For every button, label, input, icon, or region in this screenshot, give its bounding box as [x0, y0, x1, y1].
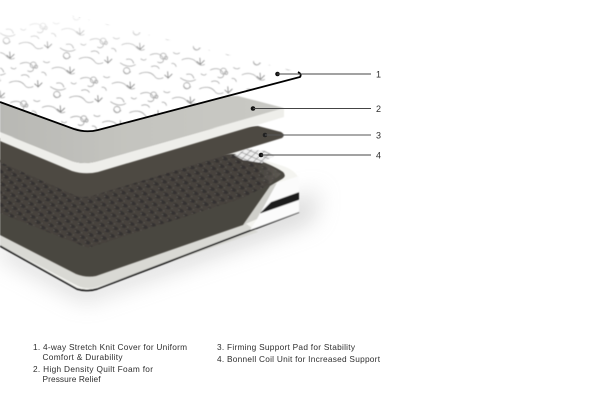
callout 2: 2: [376, 104, 381, 114]
callout 4: [259, 150, 381, 160]
legend: left column: 2. High Density Quilt Foam for: [33, 364, 153, 374]
legend: right column: 4. Bonnell Coil Unit for Increased Support: [217, 354, 381, 364]
legend: left column: Pressure Relief: [42, 374, 101, 384]
callout 1: [275, 70, 381, 80]
legend: left column: [33, 342, 187, 384]
black side band: [259, 192, 299, 214]
panel: mattress exploded view: [0, 16, 318, 300]
legend: right column: [217, 342, 381, 364]
callout 4: 4: [376, 150, 381, 160]
layer: mattress base: [0, 152, 299, 290]
legend: left column: 1. 4-way Stretch Knit Cover for Uniform: [33, 342, 187, 352]
layer 4: bonnell coil unit: [0, 149, 285, 277]
folded corner: [243, 183, 277, 225]
exposed coil wires: [234, 149, 274, 163]
layer 3: firming support pad: [0, 126, 284, 197]
layer 2: quilt foam: [0, 96, 284, 173]
callout 3: [263, 130, 381, 140]
drop shadow under mattress: [0, 190, 318, 300]
legend: left column: Comfort & Durability: [42, 352, 123, 362]
legend: right column: 3. Firming Support Pad for Stability: [217, 342, 356, 352]
callout 3: 3: [376, 130, 381, 140]
callout 1: 1: [376, 70, 381, 80]
callout 2: [251, 104, 381, 114]
layer 1: knit cover: [0, 16, 301, 131]
